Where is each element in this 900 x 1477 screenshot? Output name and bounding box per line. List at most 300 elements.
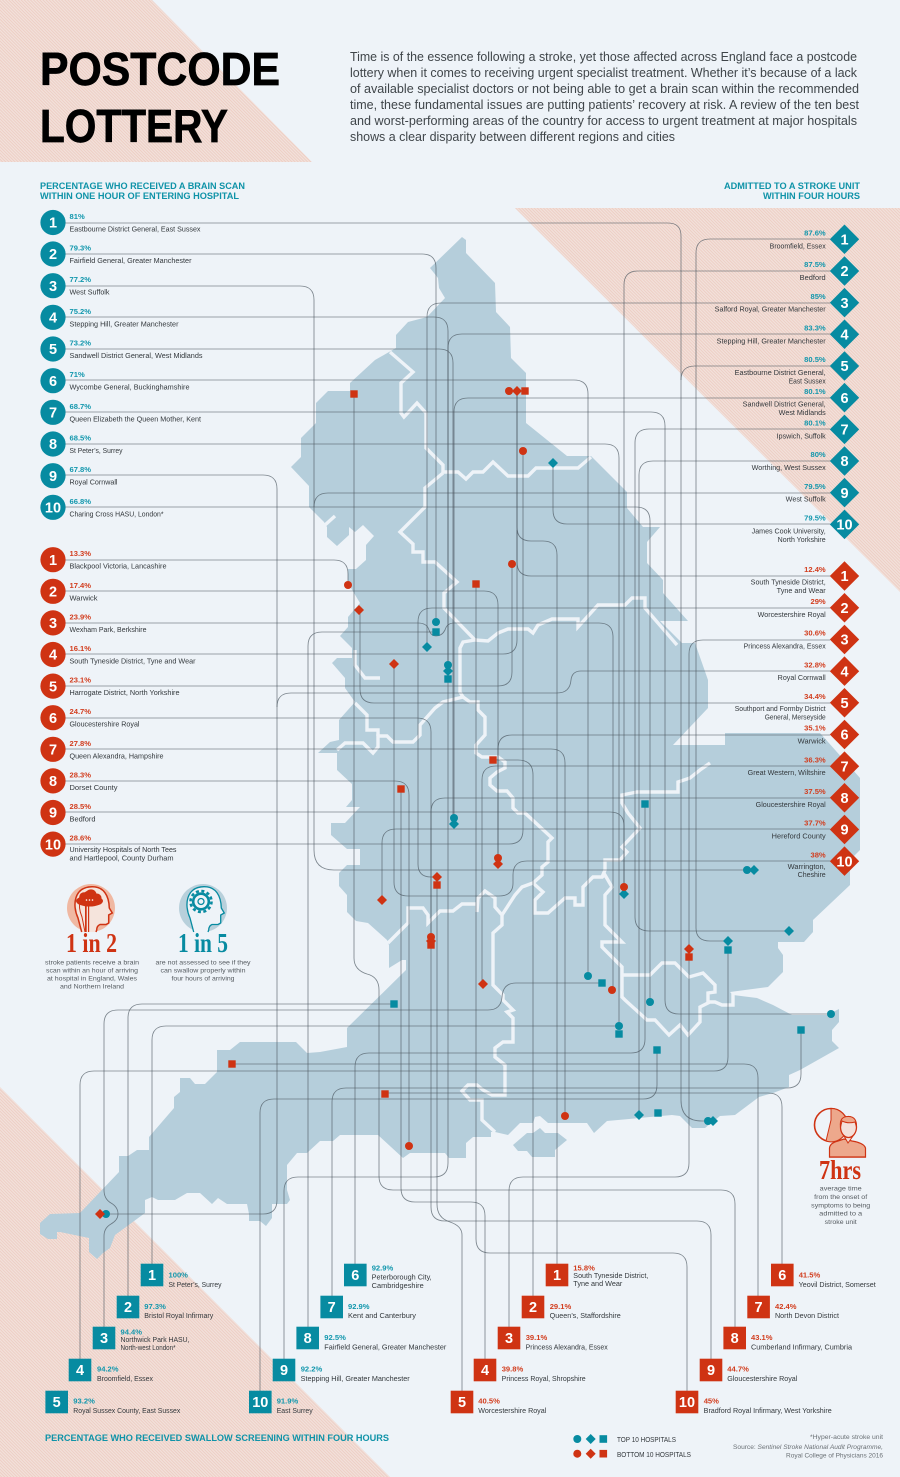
stroke unit bottom 9 — [772, 815, 859, 844]
legend — [573, 1434, 691, 1459]
brain scan top 10: Charing Cross HASU, London* — [70, 511, 164, 518]
stroke unit top 8: 8 — [840, 454, 849, 470]
stroke unit bottom 8: 8 — [840, 791, 849, 807]
stroke unit top 4: Stepping Hill, Greater Manchester — [717, 338, 826, 345]
stroke unit bottom 1: Tyne and Wear — [777, 588, 826, 595]
intro paragraph: of available specialist doctors or not being able to get a brain scan within the recommended — [350, 82, 859, 96]
stroke unit bottom 5: General, Merseyside — [765, 714, 826, 721]
stroke unit top 10: 79.5% — [804, 514, 826, 523]
swallow bottom 7 — [747, 1296, 839, 1320]
stroke unit top 2: Bedford — [800, 275, 826, 282]
brain scan top 8: 8 — [49, 437, 57, 453]
brain scan bottom 8: Dorset County — [70, 785, 118, 792]
brain scan top 5: 5 — [49, 342, 57, 358]
swallow bottom 4: 4 — [481, 1363, 489, 1379]
brain scan bottom 5 — [40, 674, 180, 699]
swallow bottom 2 — [522, 1296, 621, 1320]
swallow bottom 5: Worcestershire Royal — [478, 1408, 547, 1415]
stroke unit bottom 8: 37.5% — [804, 787, 826, 796]
stroke unit top 9: 79.5% — [804, 482, 826, 491]
stroke unit bottom 1: 1 — [840, 569, 849, 585]
swallow top 5 — [45, 1391, 181, 1415]
brain scan bottom 9: Bedford — [70, 816, 96, 824]
title: LOTTERY — [40, 100, 228, 152]
brain scan top 6: Wycombe General, Buckinghamshire — [70, 385, 190, 392]
brain scan top 1: 1 — [49, 216, 57, 232]
stroke unit top 2: 87.5% — [804, 260, 826, 269]
intro paragraph: Time is of the essence following a stroke, yet those affected across England face a postcode — [350, 50, 857, 64]
swallow bottom 5: 5 — [458, 1395, 466, 1411]
brain scan top 2: 79.3% — [70, 244, 91, 252]
swallow bottom 4: 39.8% — [502, 1365, 523, 1374]
stroke unit bottom 6: 35.1% — [804, 724, 826, 733]
brain scan bottom 2: Warwick — [70, 595, 98, 602]
stroke unit bottom 7: 36.3% — [804, 755, 826, 764]
swallow top 1: 1 — [148, 1268, 156, 1284]
brain scan top 6: 71% — [70, 370, 85, 379]
stroke unit bottom 2: Worcestershire Royal — [758, 612, 826, 619]
icon: clock pie and person — [814, 1108, 866, 1158]
caption: 1 in 5: are not assessed to see if they — [156, 960, 251, 966]
swallow bottom 1: South Tyneside District, — [573, 1273, 648, 1280]
swallow bottom 1: 15.8% — [573, 1264, 595, 1273]
stroke unit bottom 5: 34.4% — [804, 692, 826, 701]
stroke unit top 7: 80.1% — [804, 419, 826, 428]
figure: 1 in 5: 1 in 5 — [178, 928, 228, 958]
brain scan top 10: 10 — [45, 500, 61, 516]
stroke unit top 1: Broomfield, Essex — [770, 243, 826, 250]
hospital markers: top 10 teal — [102, 458, 835, 1218]
swallow top 7: Kent and Canterbury — [348, 1313, 417, 1320]
brain scan bottom 10: 28.6% — [70, 834, 91, 843]
swallow top 8: 92.5% — [324, 1333, 346, 1342]
brain scan top 4: 75.2% — [70, 307, 91, 316]
stroke unit bottom 6 — [798, 720, 859, 749]
swallow top 10: 10 — [252, 1395, 268, 1411]
caption: 7hrs — [811, 1186, 871, 1226]
swallow bottom 1: 1 — [553, 1268, 561, 1284]
stroke unit bottom 10 — [788, 846, 859, 879]
stroke unit top 3: 3 — [840, 296, 849, 312]
stroke unit bottom 4 — [778, 656, 859, 686]
brain scan top 3 — [40, 273, 110, 298]
title — [40, 43, 280, 152]
brain scan top 1: 81% — [70, 212, 85, 221]
caption: 7hrs: admitted to a — [819, 1211, 863, 1218]
brain scan bottom 7: 7 — [49, 742, 57, 758]
swallow bottom 6 — [771, 1264, 876, 1289]
stroke unit top 8: 80% — [810, 450, 826, 459]
brain scan top 8 — [40, 431, 123, 457]
brain scan bottom 4: South Tyneside District, Tyne and Wear — [70, 658, 196, 666]
legend: BOTTOM 10 HOSPITALS — [617, 1452, 691, 1459]
brain scan bottom 10: University Hospitals of North Tees — [70, 847, 177, 854]
swallow top 4: Broomfield, Essex — [97, 1376, 154, 1383]
stroke unit bottom 6: 6 — [840, 728, 849, 744]
brain scan top 4 — [40, 305, 179, 330]
stroke unit bottom 10: Cheshire — [798, 872, 826, 879]
stroke unit bottom 4: 4 — [840, 664, 849, 680]
brain scan bottom 4: 16.1% — [70, 644, 91, 653]
stroke unit bottom 9: Hereford County — [772, 834, 826, 840]
stroke unit bottom 5: 5 — [840, 696, 849, 712]
stroke unit top 5: Eastbourne District General, — [735, 370, 826, 377]
swallow bottom 3 — [498, 1327, 608, 1352]
swallow top 1 — [141, 1264, 222, 1289]
brain scan top 6 — [40, 368, 190, 393]
swallow bottom 10: 45% — [704, 1396, 719, 1406]
stroke unit bottom 4: Royal Cornwall — [778, 675, 826, 682]
stroke unit bottom 2: 29% — [810, 597, 826, 606]
brain scan bottom 5: 5 — [49, 679, 57, 695]
brain scan top 3: 77.2% — [70, 275, 91, 284]
stroke unit bottom 1: 12.4% — [804, 565, 826, 574]
swallow top 2 — [117, 1296, 214, 1320]
caption: 1 in 2 — [45, 960, 139, 991]
brain scan bottom 2: 17.4% — [70, 581, 91, 590]
swallow top 2: Bristol Royal Infirmary — [144, 1313, 214, 1320]
brain scan top 2: Fairfield General, Greater Manchester — [70, 258, 192, 265]
panel: swallow screening within four hours — [45, 1264, 876, 1443]
source and footnote: Royal College of Physicians 2016 — [786, 1452, 883, 1460]
swallow top 1: St Peter’s, Surrey — [168, 1282, 222, 1289]
swallow top 6: Peterborough City, — [372, 1274, 432, 1282]
brain scan bottom 10: and Hartlepool, County Durham — [70, 856, 174, 862]
swallow top 4 — [69, 1359, 154, 1383]
stroke unit top 3: 85% — [810, 292, 826, 301]
brain scan bottom 6: 24.7% — [70, 707, 91, 716]
swallow top 3: Northwick Park HASU, — [120, 1337, 190, 1344]
brain scan top 7: 68.7% — [70, 402, 91, 411]
brain scan top 1 — [40, 210, 201, 235]
brain scan bottom 3: 3 — [49, 616, 57, 632]
stroke unit top 10: North Yorkshire — [778, 537, 826, 544]
stroke unit bottom 9: 37.7% — [804, 819, 826, 828]
swallow bottom 1: Tyne and Wear — [573, 1281, 623, 1288]
panel: admitted to a stroke unit — [715, 180, 860, 879]
stroke unit top 5: 5 — [840, 359, 849, 375]
swallow top 6: 6 — [351, 1268, 359, 1284]
swallow top 1: 100% — [168, 1270, 188, 1280]
brain scan bottom 1 — [40, 547, 167, 572]
brain scan top 1: Eastbourne District General, East Sussex — [70, 226, 201, 234]
stroke unit bottom 7 — [748, 751, 859, 781]
connector lines from labels to hospitals — [65, 223, 831, 1391]
swallow bottom 8: 8 — [731, 1331, 739, 1347]
brain scan top 9: Royal Cornwall — [70, 480, 118, 487]
stroke unit top 5 — [735, 351, 859, 385]
stat: 7 hours — [811, 1108, 871, 1226]
swallow bottom 9: 9 — [707, 1363, 715, 1379]
stroke unit bottom 10: 38% — [810, 850, 826, 859]
brain scan bottom 2: 2 — [49, 584, 57, 600]
brain scan bottom 5: 23.1% — [70, 676, 91, 685]
swallow top 4: 94.2% — [97, 1365, 119, 1374]
swallow top 7: 7 — [328, 1300, 336, 1316]
brain scan top 9: 9 — [49, 469, 57, 485]
brain scan bottom 8 — [40, 768, 118, 794]
brain scan bottom 9: 28.5% — [70, 802, 91, 811]
swallow top 8: Fairfield General, Greater Manchester — [324, 1345, 447, 1352]
swallow top 2: 2 — [124, 1300, 132, 1316]
icon: head with gear — [179, 884, 227, 932]
brain scan bottom 5: Harrogate District, North Yorkshire — [70, 690, 180, 697]
stroke unit top 9: West Suffolk — [786, 497, 826, 504]
swallow top 3: 3 — [100, 1331, 108, 1347]
brain scan top 7 — [40, 400, 201, 425]
stroke unit top 7: 7 — [840, 423, 849, 439]
stroke unit top 4: 4 — [840, 328, 849, 344]
stroke unit bottom 3: 30.6% — [804, 629, 826, 638]
stroke unit top 9 — [786, 478, 859, 507]
brain scan top 4: 4 — [49, 310, 57, 326]
swallow bottom 1 — [546, 1264, 648, 1288]
figure: 1 in 2: 1 in 2 — [66, 928, 117, 958]
brain scan top 2 — [40, 241, 192, 267]
figure: 7hrs: 7hrs — [819, 1155, 861, 1185]
brain scan top 5: 73.2% — [70, 338, 91, 348]
stroke unit top 1 — [770, 224, 859, 254]
stroke unit top 6: 6 — [840, 391, 849, 407]
stroke unit top 7 — [777, 415, 859, 444]
swallow top 9: 9 — [280, 1363, 288, 1379]
brain scan bottom 10: 10 — [45, 837, 61, 853]
brain scan bottom 1: Blackpool Victoria, Lancashire — [70, 564, 167, 571]
brain scan bottom 6: Gloucestershire Royal — [70, 722, 140, 729]
swallow bottom 9 — [700, 1359, 798, 1383]
swallow top 10 — [249, 1391, 313, 1415]
stroke unit top 10: James Cook University, — [752, 528, 826, 535]
brain scan top 3: 3 — [49, 279, 57, 295]
hospital markers: bottom 10 red — [95, 386, 694, 1219]
stroke unit top 4: 83.3% — [804, 324, 826, 332]
brain scan top 8: St Peter’s, Surrey — [70, 448, 123, 455]
panel: brain scan within one hour — [40, 180, 245, 862]
caption: 7hrs: average time — [820, 1186, 862, 1193]
intro paragraph: and worst-performing areas of the country for access to urgent treatment at major hospitals — [350, 114, 857, 128]
stroke unit top 6 — [743, 383, 859, 417]
caption: 1 in 5 — [156, 960, 251, 983]
caption: 1 in 5: four hours of arriving — [172, 976, 235, 983]
swallow bottom 5: 40.5% — [478, 1396, 500, 1406]
swallow bottom 2: 29.1% — [550, 1302, 571, 1311]
swallow bottom 6: 6 — [778, 1268, 786, 1284]
source and footnote: Source: Sentinel Stroke National Audit Programme, — [733, 1444, 883, 1451]
caption: 7hrs: symptoms to being — [811, 1202, 871, 1210]
brain scan top 10: 66.8% — [70, 497, 91, 506]
stroke unit bottom 8 — [756, 783, 859, 812]
stat: 1 in 5 — [156, 884, 251, 983]
brain scan top 7: Queen Elizabeth the Queen Mother, Kent — [70, 416, 201, 423]
brain scan bottom 4 — [40, 642, 196, 667]
caption: 1 in 2: and Northern Ireland — [60, 984, 124, 991]
caption: 1 in 2: at hospital in England, Wales — [47, 976, 138, 983]
caption: 1 in 2: stroke patients receive a brain — [45, 960, 139, 966]
swallow bottom 3: 39.1% — [526, 1333, 547, 1342]
swallow top 9: 92.2% — [301, 1365, 322, 1374]
heading: stroke unit: ADMITTED TO A STROKE UNIT — [724, 180, 860, 191]
intro paragraph — [350, 50, 859, 144]
brain scan top 7: 7 — [49, 406, 57, 422]
caption: 7hrs: stroke unit — [825, 1219, 857, 1226]
brain scan bottom 6: 6 — [49, 711, 57, 727]
swallow bottom 6: Yeovil District, Somerset — [799, 1282, 876, 1289]
swallow top 7: 92.9% — [348, 1302, 370, 1311]
swallow bottom 3: 3 — [505, 1331, 513, 1347]
stroke unit bottom 1: South Tyneside District, — [751, 580, 826, 586]
source and footnote: *Hyper-acute stroke unit — [810, 1434, 883, 1441]
brain scan bottom 8: 8 — [49, 774, 57, 790]
swallow bottom 10: Bradford Royal Infirmary, West Yorkshire — [704, 1408, 832, 1415]
intro paragraph: shows a clear disparity between different regions and cities — [350, 130, 675, 144]
brain scan bottom 9 — [40, 800, 96, 825]
brain scan bottom 2 — [40, 579, 98, 604]
brain scan bottom 9: 9 — [49, 806, 57, 822]
stroke unit top 2 — [800, 256, 859, 286]
caption: 1 in 5: can swallow properly within — [160, 968, 246, 974]
brain scan bottom 3: 23.9% — [70, 612, 91, 621]
swallow top 5: 5 — [53, 1395, 61, 1411]
brain scan bottom 8: 28.3% — [70, 770, 91, 779]
stroke unit bottom 10: Warrington, — [788, 864, 826, 871]
swallow bottom 6: 41.5% — [799, 1270, 820, 1280]
brain scan bottom 3: Wexham Park, Berkshire — [70, 627, 147, 634]
brain scan top 9: 67.8% — [70, 465, 91, 474]
swallow top 5: 93.2% — [73, 1396, 95, 1406]
brain scan bottom 7: 27.8% — [70, 739, 91, 748]
stroke unit bottom 7: 7 — [840, 759, 849, 775]
heading: swallow screening: PERCENTAGE WHO RECEIVED SWALLOW SCREENING WITHIN FOUR HOURS — [45, 1432, 389, 1443]
swallow top 8: 8 — [304, 1331, 312, 1347]
swallow bottom 4 — [474, 1359, 586, 1383]
swallow top 3 — [93, 1327, 190, 1352]
stroke unit bottom 9: 9 — [840, 823, 849, 839]
brain scan top 5: Sandwell District General, West Midlands — [70, 353, 203, 360]
brain scan bottom 1: 1 — [49, 553, 57, 569]
swallow top 4: 4 — [76, 1363, 84, 1379]
swallow bottom 10 — [676, 1391, 832, 1415]
map of England with regional borders — [40, 237, 860, 1259]
swallow bottom 2: Queen’s, Staffordshire — [550, 1313, 621, 1320]
stroke unit top 3: Salford Royal, Greater Manchester — [715, 307, 826, 314]
swallow top 10: East Surrey — [277, 1408, 313, 1415]
swallow top 8 — [296, 1327, 447, 1352]
stroke unit top 6: Sandwell District General, — [743, 402, 826, 409]
brain scan bottom 3 — [40, 610, 147, 636]
stroke unit top 9: 9 — [840, 486, 849, 502]
stroke unit bottom 3 — [744, 625, 859, 654]
stroke unit top 10: 10 — [836, 518, 853, 534]
swallow top 10: 91.9% — [277, 1396, 298, 1406]
swallow top 7 — [320, 1296, 417, 1320]
stroke unit bottom 2 — [758, 593, 859, 622]
brain scan bottom 1: 13.3% — [70, 549, 91, 558]
legend: TOP 10 HOSPITALS — [617, 1437, 676, 1444]
swallow bottom 8 — [723, 1327, 852, 1352]
brain scan top 2: 2 — [49, 247, 57, 263]
brain scan top 6: 6 — [49, 374, 57, 390]
stroke unit bottom 3: 3 — [840, 633, 849, 649]
brain scan bottom 7 — [40, 737, 164, 762]
stroke unit top 6: West Midlands — [779, 410, 826, 417]
intro paragraph: lottery when it comes to receiving urgent specialist treatment. Whether it’s because of a lack — [350, 66, 858, 80]
brain scan top 9 — [40, 463, 118, 488]
swallow bottom 7: 42.4% — [775, 1302, 797, 1311]
stroke unit bottom 4: 32.8% — [804, 660, 826, 669]
heading: stroke unit: WITHIN FOUR HOURS — [763, 190, 860, 201]
stroke unit bottom 5 — [735, 688, 859, 721]
swallow bottom 8: Cumberland Infirmary, Cumbria — [751, 1345, 852, 1352]
swallow top 6: 92.9% — [372, 1264, 393, 1273]
brain scan top 10 — [40, 495, 164, 520]
icon: head with brain cloud — [67, 884, 115, 932]
swallow bottom 7: 7 — [755, 1300, 763, 1316]
swallow bottom 4: Princess Royal, Shropshire — [502, 1376, 586, 1383]
caption: 7hrs: from the onset of — [814, 1194, 867, 1201]
heading: brain scan: PERCENTAGE WHO RECEIVED A BRAIN SCAN — [40, 180, 245, 191]
stroke unit bottom 6: Warwick — [798, 738, 826, 746]
stroke unit top 6: 80.1% — [804, 387, 826, 396]
swallow bottom 10: 10 — [679, 1395, 695, 1411]
swallow top 9 — [273, 1359, 410, 1383]
stroke unit top 3 — [715, 288, 859, 317]
stroke unit top 10 — [752, 510, 859, 544]
swallow bottom 3: Princess Alexandra, Essex — [526, 1345, 608, 1352]
swallow top 3: North-west London* — [120, 1345, 176, 1352]
intro paragraph: time, these fundamental issues are putting patients’ recovery at risk. A review of the ten best — [350, 98, 859, 112]
swallow bottom 9: 44.7% — [727, 1365, 749, 1374]
stroke unit top 8 — [752, 446, 859, 476]
stroke unit top 5: 80.5% — [804, 355, 826, 364]
swallow top 2: 97.3% — [144, 1302, 166, 1311]
swallow top 3: 94.4% — [120, 1328, 142, 1336]
brain scan bottom 6 — [40, 705, 140, 730]
source and footnote — [733, 1434, 883, 1460]
stroke unit bottom 2: 2 — [840, 601, 849, 617]
stroke unit bottom 7: Great Western, Wiltshire — [748, 770, 826, 777]
swallow bottom 9: Gloucestershire Royal — [727, 1376, 798, 1383]
swallow top 6 — [344, 1264, 432, 1290]
brain scan top 8: 68.5% — [70, 434, 91, 442]
heading: brain scan: WITHIN ONE HOUR OF ENTERING HOSPITAL — [40, 190, 239, 201]
stroke unit bottom 10: 10 — [836, 854, 853, 870]
stroke unit top 4 — [717, 320, 859, 349]
caption: 1 in 2: scan within an hour of arriving — [46, 968, 138, 974]
brain scan bottom 10 — [40, 832, 177, 862]
swallow bottom 2: 2 — [529, 1300, 537, 1316]
brain scan top 4: Stepping Hill, Greater Manchester — [70, 321, 179, 328]
heading: brain scan — [40, 180, 245, 201]
stroke unit bottom 8: Gloucestershire Royal — [756, 802, 826, 809]
swallow top 9: Stepping Hill, Greater Manchester — [301, 1376, 410, 1383]
stroke unit top 8: Worthing, West Sussex — [752, 465, 826, 472]
swallow top 5: Royal Sussex County, East Sussex — [73, 1408, 181, 1415]
stroke unit bottom 5: Southport and Formby District — [735, 706, 826, 713]
swallow bottom 7: North Devon District — [775, 1313, 839, 1320]
brain scan bottom 7: Queen Alexandra, Hampshire — [70, 753, 164, 760]
stat: 1 in 2 — [45, 884, 139, 991]
brain scan top 5 — [40, 336, 203, 362]
swallow bottom 5 — [451, 1391, 547, 1415]
swallow top 6: Cambridgeshire — [372, 1283, 424, 1290]
brain scan bottom 4: 4 — [49, 648, 57, 664]
stroke unit top 1: 1 — [840, 232, 849, 248]
stroke unit top 1: 87.6% — [804, 228, 826, 238]
swallow bottom 8: 43.1% — [751, 1333, 773, 1342]
stroke unit bottom 1 — [751, 561, 859, 595]
stroke unit top 2: 2 — [840, 264, 849, 280]
stroke unit top 5: East Sussex — [789, 378, 826, 385]
